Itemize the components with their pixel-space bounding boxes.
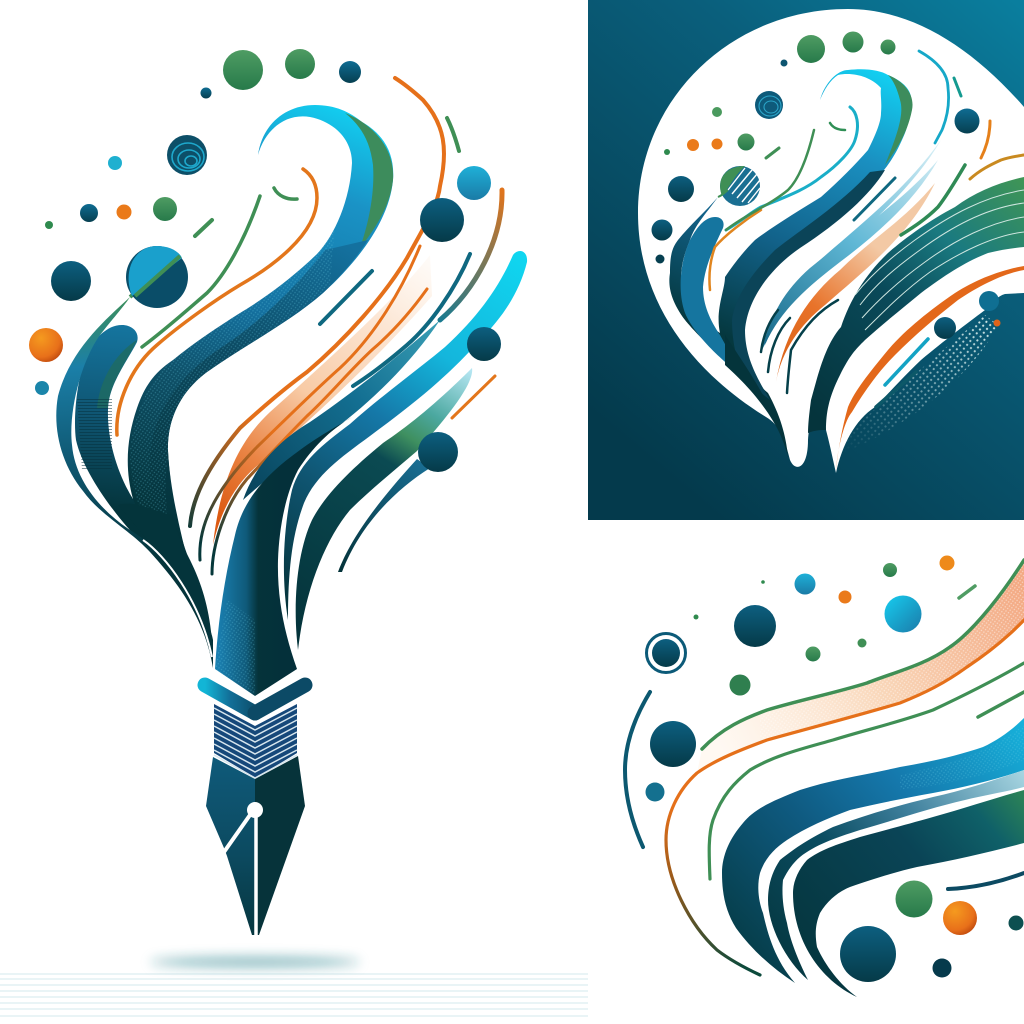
- lower green line: [709, 663, 1024, 879]
- dark flow lines: [761, 300, 838, 393]
- ring circle: [646, 634, 686, 672]
- large two-tone sphere: [126, 246, 188, 308]
- blade stripes: [77, 398, 112, 470]
- cyan inner curve: [726, 107, 857, 230]
- white speech-bubble shape: [638, 9, 1024, 473]
- stippled orange band: [213, 255, 432, 545]
- ground shadow with horizontal lines: [0, 957, 588, 1016]
- green smile stroke: [830, 123, 845, 130]
- panel: bottom right swirl: [625, 556, 1024, 997]
- green dash: [766, 148, 779, 158]
- striped sphere top: [755, 91, 783, 119]
- central stem: [215, 417, 352, 696]
- root white sliver: [143, 540, 212, 657]
- short green line: [978, 692, 1024, 717]
- blue stipple strand: [761, 140, 941, 352]
- speckled teal strand: [243, 320, 440, 500]
- ribbon green shade: [885, 75, 913, 165]
- tapered strand to ball: [338, 459, 430, 572]
- nib left half: [206, 757, 255, 935]
- nib right half: [255, 756, 305, 935]
- panel: main pen illustration: [0, 49, 588, 1016]
- teal dash lower: [876, 372, 916, 407]
- blue ribbon highlight: [900, 725, 1024, 790]
- ribbon: main S-curve: [128, 105, 393, 665]
- orange green curve: [970, 155, 1024, 179]
- orange stipple strand: [776, 183, 935, 382]
- thick orange curve: [836, 266, 1024, 470]
- dots: [652, 32, 1000, 339]
- band stipple texture: [760, 562, 1024, 740]
- green inner curve: [726, 130, 814, 230]
- cyan dash: [885, 339, 928, 385]
- orange long curve: [666, 620, 1024, 975]
- ribbon lower dark layer: [732, 170, 885, 400]
- left blade: [681, 217, 742, 375]
- orange to teal upper curve: [440, 190, 502, 320]
- outer left thin ribbon: [56, 297, 213, 668]
- bundle light streaks: [855, 190, 1024, 330]
- green dash: [195, 220, 212, 236]
- dots: [646, 556, 1024, 982]
- dark line: [948, 873, 1024, 889]
- teal dash upper: [954, 78, 961, 96]
- dark ribbon: [793, 790, 1024, 997]
- blade green shade: [97, 340, 137, 408]
- panel background: [588, 0, 1024, 520]
- dark root junction: [118, 504, 213, 660]
- green dash: [959, 586, 975, 598]
- green smile stroke: [274, 188, 297, 199]
- blue-white band: [765, 160, 938, 345]
- ribbon: main curve: [669, 69, 911, 457]
- green dash upper right: [447, 118, 459, 151]
- dots: [29, 49, 501, 472]
- panel: top right dark square: [588, 0, 1024, 520]
- pen collar: [205, 683, 305, 720]
- ribbon: green outer layer: [345, 113, 393, 248]
- upper green line: [702, 560, 1024, 749]
- teal dash: [854, 178, 895, 220]
- teal arc left: [625, 692, 650, 847]
- green-blue tail to sphere: [130, 255, 180, 297]
- nib slit and breather hole: [224, 802, 263, 936]
- orange dash: [981, 121, 990, 158]
- inner green curve: [142, 196, 260, 347]
- stream bundle: [808, 177, 1024, 433]
- stem stipple: [215, 600, 255, 696]
- bottom dark root: [725, 335, 788, 457]
- ribbon: dark lower layer: [150, 240, 368, 570]
- cyan arc: [919, 51, 949, 143]
- teal dash: [320, 271, 372, 324]
- green teal curve: [901, 165, 965, 235]
- orange flow lines: [190, 78, 444, 574]
- inner orange curve: [117, 169, 317, 435]
- dark green strand: [296, 368, 472, 650]
- ribbon stipple texture: [130, 222, 335, 530]
- wavy banded section: [214, 704, 297, 778]
- striped sphere: [167, 135, 207, 175]
- dissolving dots: [840, 315, 998, 452]
- blue ribbon: [722, 718, 1024, 983]
- orange short line: [452, 376, 495, 418]
- striped sphere middle: [718, 166, 760, 206]
- stippled band: [697, 562, 1024, 773]
- left blade ribbon: [75, 325, 160, 560]
- teal long curve: [353, 254, 470, 386]
- middle ribbon: [768, 770, 1024, 980]
- orange inner curve: [709, 210, 761, 290]
- cyan band: [284, 251, 527, 620]
